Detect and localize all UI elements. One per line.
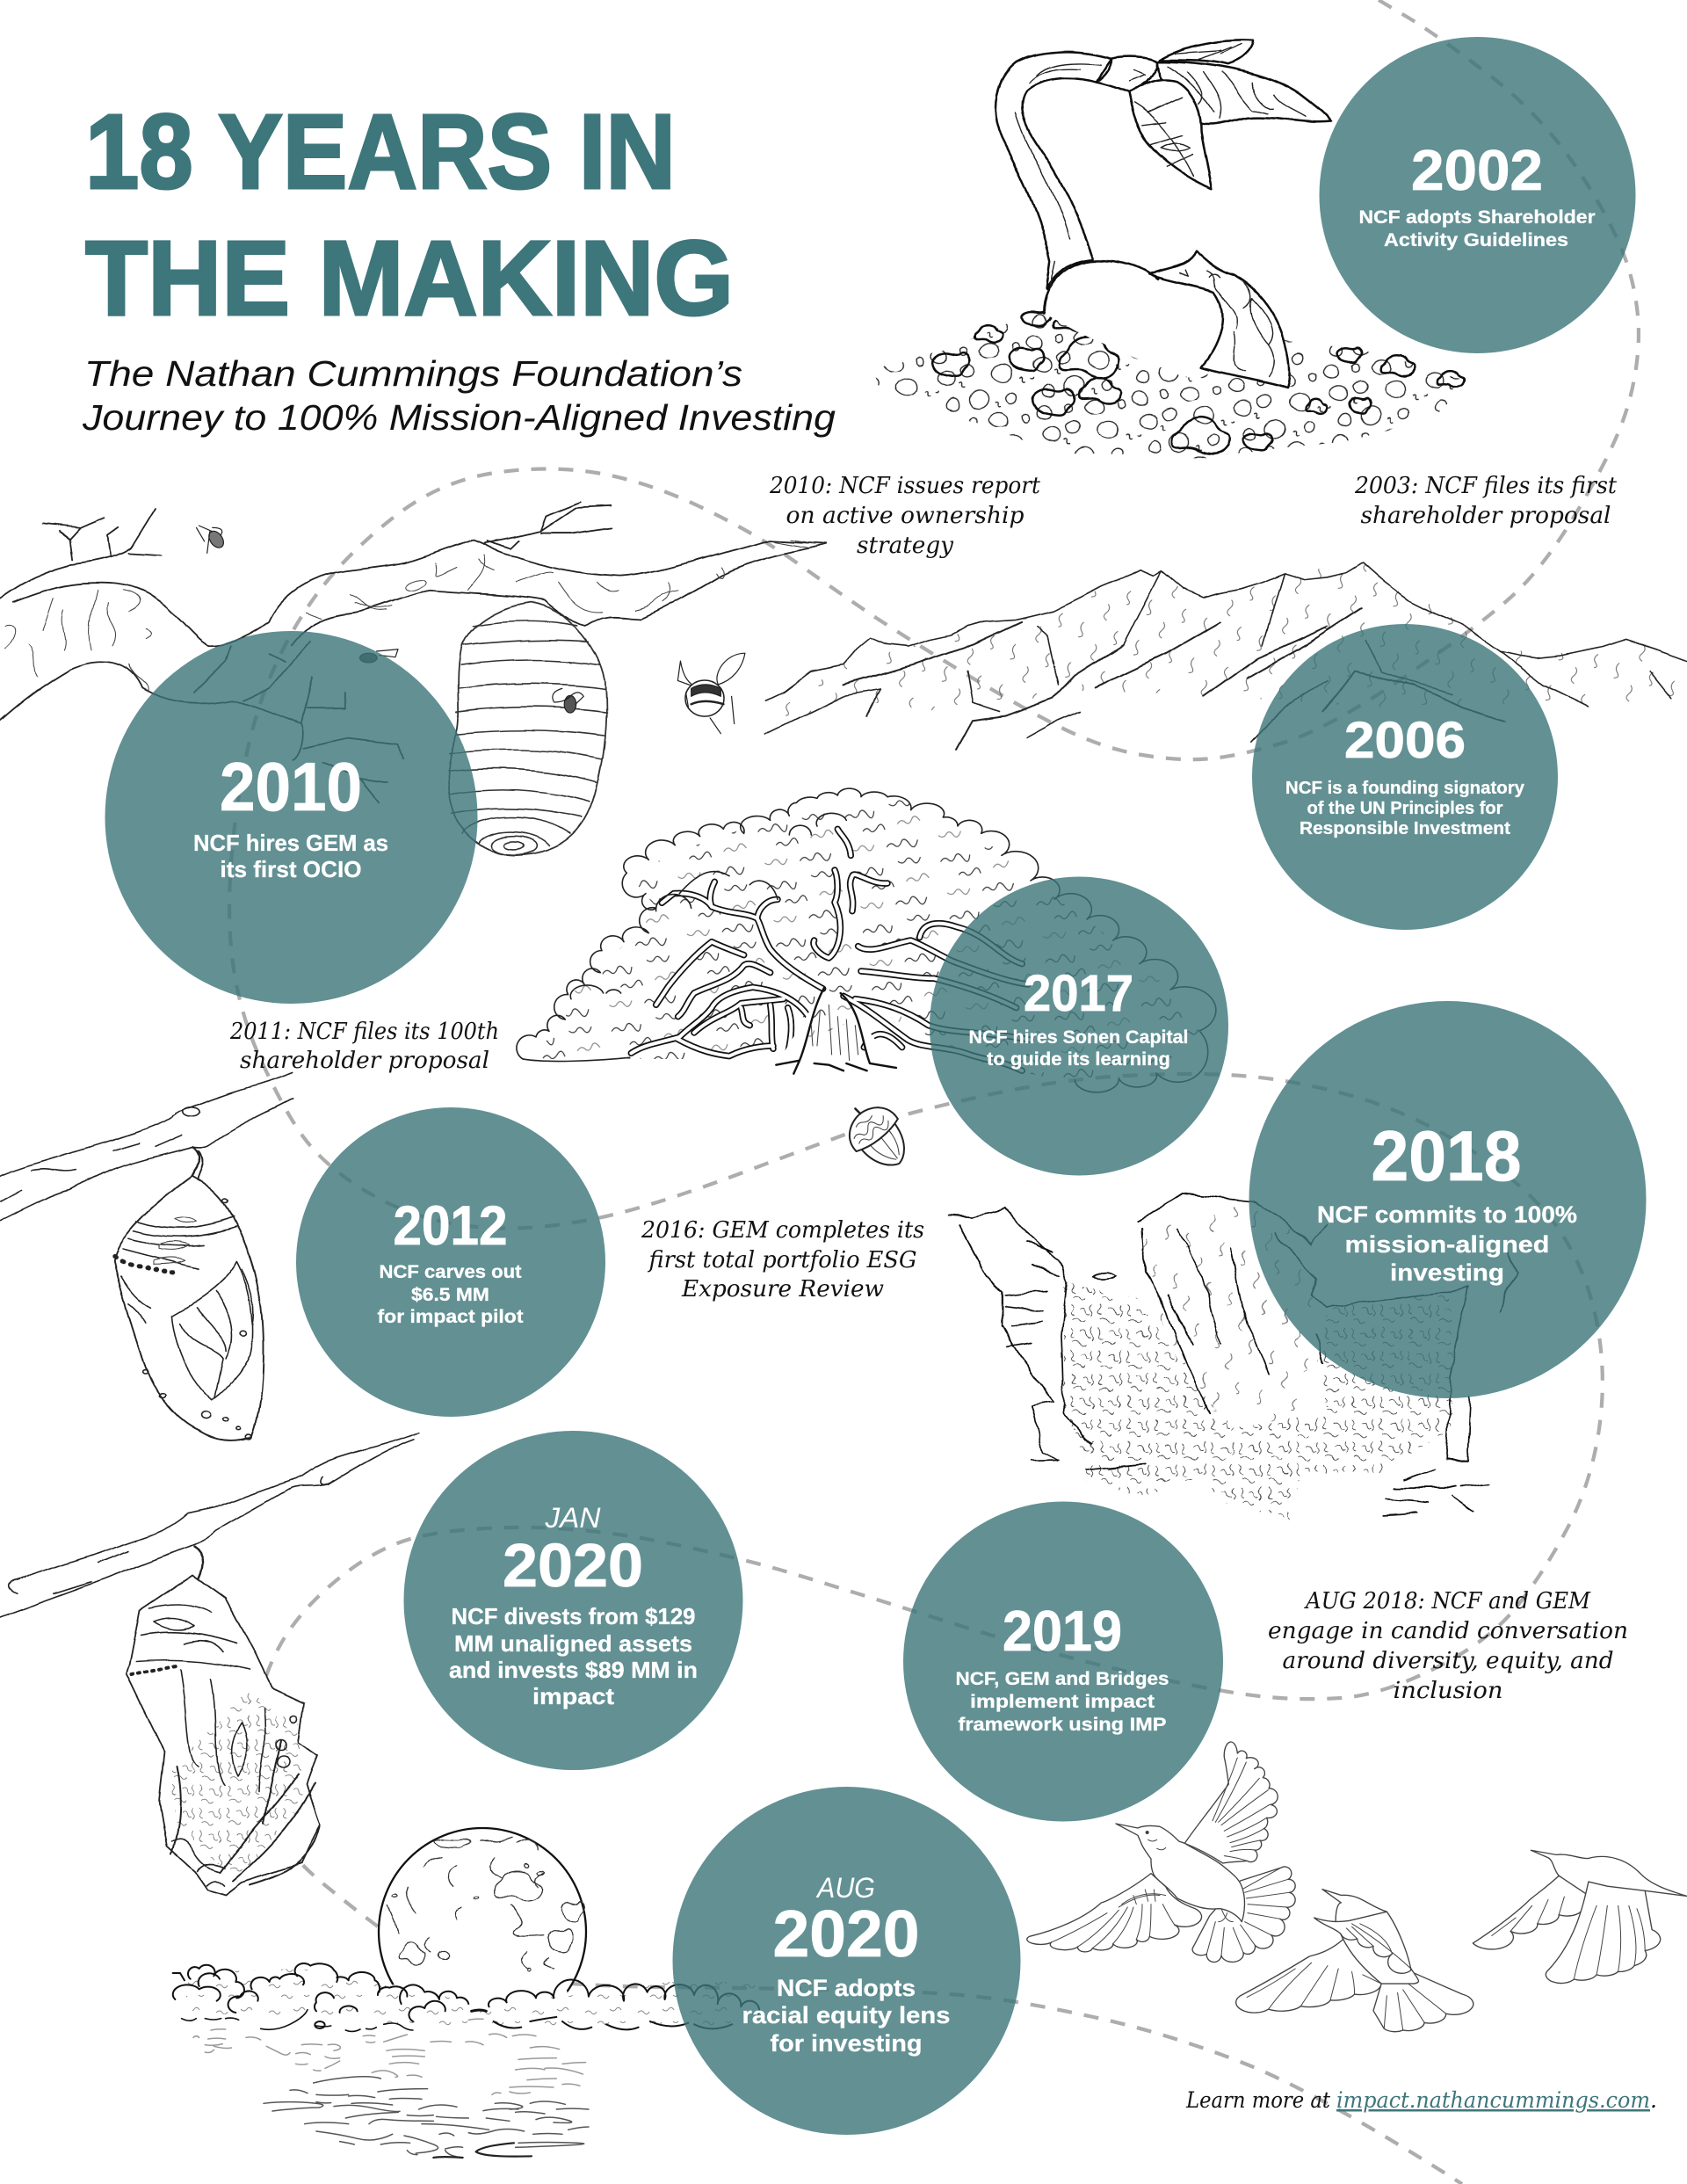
milestone circle: 2006 bbox=[1252, 624, 1558, 930]
milestone circle: August 2020: AUG bbox=[815, 1872, 875, 1904]
note: August 2018 conversation: inclusion bbox=[1394, 1678, 1502, 1704]
note: 2011 proposal bbox=[229, 1019, 499, 1074]
milestone circle: 2012: $6.5 MM bbox=[411, 1285, 489, 1305]
note: 2010 report: strategy bbox=[857, 533, 953, 559]
note: 2010 report: 2010: NCF issues report bbox=[769, 473, 1041, 499]
note: 2003 proposal: shareholder proposal bbox=[1360, 503, 1611, 529]
milestone circle: 2006: Responsible Investment bbox=[1300, 819, 1510, 838]
milestone circle: 2002: NCF adopts Shareholder bbox=[1358, 207, 1596, 228]
milestone circle: 2012: NCF carves out bbox=[380, 1262, 522, 1282]
note: 2016 review: 2016: GEM completes its bbox=[641, 1217, 924, 1244]
milestone circle: 2018 bbox=[1249, 1001, 1647, 1398]
milestone circle: January 2020 bbox=[404, 1431, 743, 1770]
milestone circle: 2012: for impact pilot bbox=[378, 1307, 524, 1327]
milestone circle: January 2020: and invests $89 MM in bbox=[449, 1657, 698, 1683]
milestone circle: 2006: of the UN Principles for bbox=[1307, 799, 1503, 818]
note: 2016 review: first total portfolio ESG bbox=[648, 1247, 917, 1273]
note: August 2018 conversation bbox=[1268, 1588, 1628, 1704]
note: 2011 proposal: shareholder proposal bbox=[240, 1048, 489, 1074]
milestone circle: 2010: its first OCIO bbox=[220, 856, 362, 882]
milestone circle: 2010: 2010 bbox=[220, 748, 362, 825]
milestone circle: August 2020: 2020 bbox=[773, 1897, 919, 1970]
icon: acorn bbox=[835, 1092, 920, 1179]
illustration: seedling sprouting from soil bbox=[872, 40, 1470, 458]
note: 2016 review bbox=[641, 1217, 924, 1302]
illustration: waterfall and cliffs bbox=[950, 1194, 1516, 1519]
milestone circle: 2018: NCF commits to 100% bbox=[1317, 1201, 1577, 1228]
subtitle: The Nathan Cummings Foundation’s bbox=[84, 353, 742, 394]
illustration: beehive bbox=[447, 602, 607, 855]
note: August 2018 conversation: engage in candid conversation bbox=[1268, 1618, 1628, 1644]
note: 2010 report bbox=[769, 473, 1041, 559]
milestone circle: 2018: 2018 bbox=[1371, 1117, 1522, 1196]
milestone circle: 2010: NCF hires GEM as bbox=[193, 830, 388, 856]
note: August 2018 conversation: around diversity, equity, and bbox=[1283, 1648, 1613, 1674]
milestone circle: January 2020: 2020 bbox=[503, 1531, 643, 1600]
milestone circle: 2019: implement impact bbox=[970, 1692, 1155, 1712]
milestone circle: 2018: mission-aligned bbox=[1344, 1231, 1550, 1258]
title: 18 YEARS IN bbox=[85, 91, 676, 211]
subtitle bbox=[82, 353, 836, 438]
milestone circle: 2017 bbox=[930, 877, 1228, 1176]
milestone circle: 2002 bbox=[1320, 37, 1636, 353]
milestone circle: 2019: framework using IMP bbox=[958, 1715, 1167, 1735]
milestone circle: 2019: NCF, GEM and Bridges bbox=[956, 1669, 1169, 1689]
milestone circle: 2006: 2006 bbox=[1344, 712, 1466, 769]
milestone circle: 2018: investing bbox=[1390, 1259, 1504, 1286]
illustration: first chrysalis on branch bbox=[0, 1072, 293, 1440]
milestone circle: 2017: to guide its learning bbox=[987, 1049, 1170, 1070]
footer link: . bbox=[1650, 2087, 1657, 2113]
milestone circle: August 2020: NCF adopts bbox=[777, 1975, 916, 2001]
note: 2016 review: Exposure Review bbox=[681, 1276, 884, 1302]
milestone circle: 2017: 2017 bbox=[1024, 965, 1133, 1022]
note: 2010 report: on active ownership bbox=[786, 503, 1025, 529]
note: August 2018 conversation: AUG 2018: NCF and GEM bbox=[1304, 1588, 1591, 1614]
title: THE MAKING bbox=[85, 218, 734, 337]
milestone circle: January 2020: impact bbox=[532, 1683, 614, 1709]
note: 2011 proposal: 2011: NCF files its 100th bbox=[229, 1019, 499, 1045]
milestone circle: 2002: Activity Guidelines bbox=[1384, 230, 1568, 250]
milestone circle: 2012: 2012 bbox=[394, 1195, 508, 1257]
milestone circle: 2006: NCF is a founding signatory bbox=[1285, 779, 1525, 798]
milestone circle: 2002: 2002 bbox=[1411, 138, 1543, 202]
milestone circle: 2017: NCF hires Sonen Capital bbox=[968, 1027, 1188, 1048]
milestone circle: January 2020: JAN bbox=[544, 1502, 601, 1534]
illustration: oak tree bbox=[517, 788, 1216, 1092]
footer link: impact.nathancummings.com bbox=[1336, 2087, 1650, 2113]
milestone circle: 2019 bbox=[903, 1501, 1223, 1821]
milestone circle: August 2020: racial equity lens bbox=[742, 2002, 951, 2028]
milestone circle: August 2020: for investing bbox=[770, 2030, 923, 2057]
illustration: second chrysalis with emerging butterfly bbox=[0, 1433, 418, 1895]
note: 2003 proposal: 2003: NCF files its first bbox=[1354, 473, 1618, 499]
milestone circle: January 2020: MM unaligned assets bbox=[454, 1630, 692, 1657]
icon: bees bbox=[196, 526, 745, 734]
subtitle: Journey to 100% Mission-Aligned Investing bbox=[82, 397, 836, 438]
milestone circle: January 2020: NCF divests from $129 bbox=[452, 1603, 696, 1629]
illustration: mountain range bbox=[766, 563, 1687, 750]
illustration: tree branch bbox=[0, 502, 826, 802]
footer link: Learn more at bbox=[1185, 2087, 1331, 2113]
illustration: three birds in flight bbox=[1027, 1742, 1687, 2032]
title bbox=[85, 91, 734, 337]
milestone circle: 2019: 2019 bbox=[1003, 1599, 1122, 1663]
footer link bbox=[1185, 2087, 1657, 2113]
illustration: moon over bushes and water bbox=[173, 1828, 759, 2158]
note: 2003 proposal bbox=[1354, 473, 1618, 529]
milestone circle: 2010 bbox=[105, 631, 478, 1004]
milestone circle: August 2020 bbox=[673, 1787, 1021, 2135]
milestone circle: 2012 bbox=[296, 1107, 605, 1417]
